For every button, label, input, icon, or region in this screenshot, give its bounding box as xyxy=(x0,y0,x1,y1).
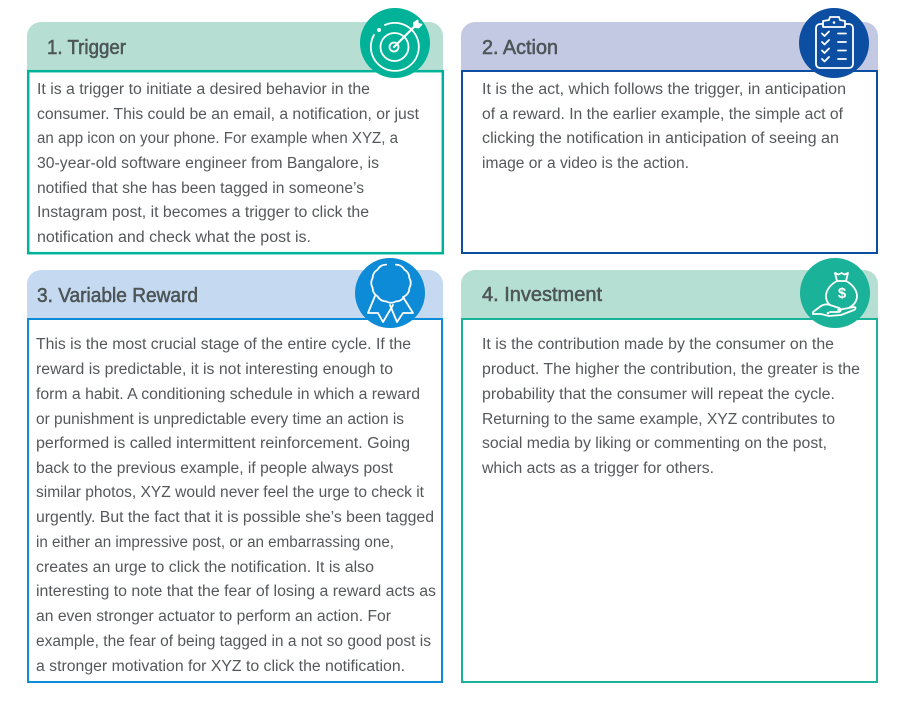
text block: Variable Reward description: in either an impressive post, or an embarrassing one, xyxy=(36,534,394,551)
text block: Investment description: which acts as a trigger for others. xyxy=(481,460,714,477)
text block: Investment description: probability that the consumer will repeat the cycle. xyxy=(482,386,835,403)
icon: target with dart xyxy=(360,8,430,78)
heading: 1. Trigger: 1. Trigger xyxy=(47,37,126,59)
text block: Variable Reward description xyxy=(36,336,436,675)
text block: Variable Reward description: form a habit. A conditioning schedule in which a reward xyxy=(36,386,420,403)
text block: Variable Reward description: a stronger motivation for XYZ to click the notification. xyxy=(36,658,405,675)
body box: Investment xyxy=(462,319,877,682)
panel: 4. Investment xyxy=(461,258,878,682)
text block: Action description: It is the act, which follows the trigger, in anticipation xyxy=(482,81,846,98)
heading: 2. Action: 2. Action xyxy=(482,37,558,59)
text block: Trigger description: Instagram post, it becomes a trigger to click the xyxy=(37,204,369,221)
text block: Variable Reward description: creates an urge to click the notification. It is also xyxy=(36,559,374,576)
panel: 2. Action xyxy=(461,8,878,253)
text block: Variable Reward description: performed is called intermittent reinforcement. Going xyxy=(36,435,410,452)
text block: Variable Reward description: back to the previous example, if people always post xyxy=(36,460,394,477)
text block: Variable Reward description: reward is predictable, it is not interesting enough to xyxy=(36,361,393,378)
heading: 3. Variable Reward: 3. Variable Reward xyxy=(37,285,198,307)
text block: Trigger description: It is a trigger to initiate a desired behavior in the xyxy=(37,81,370,98)
text block: Action description: image or a video is the action. xyxy=(482,155,689,172)
text block: Action description xyxy=(482,81,846,172)
text block: Investment description: product. The higher the contribution, the greater is the xyxy=(482,361,860,378)
text block: Trigger description: an app icon on your phone. For example when XYZ, a xyxy=(37,130,398,147)
text block: Trigger description: consumer. This could be an email, a notification, or just xyxy=(37,106,420,123)
icon: clipboard checklist xyxy=(799,8,869,78)
icon: award ribbon xyxy=(355,258,425,328)
text block: Trigger description: notified that she has been tagged in someone’s xyxy=(37,180,364,197)
text block: Trigger description xyxy=(37,81,420,246)
text block: Variable Reward description: or punishment is unpredictable every time an action is xyxy=(36,411,404,428)
body box: Variable Reward xyxy=(28,319,442,682)
text block: Variable Reward description: similar photos, XYZ would never feel the urge to check it xyxy=(36,484,425,501)
text block: Investment description: It is the contribution made by the consumer on the xyxy=(482,336,834,353)
header band: Investment xyxy=(461,270,878,319)
text block: Variable Reward description: interesting to note that the fear of losing a reward acts as xyxy=(36,583,436,600)
text block: Action description: clicking the notification in anticipation of seeing an xyxy=(482,130,839,147)
body box: Action xyxy=(462,71,877,253)
text block: Investment description: Returning to the same example, XYZ contributes to xyxy=(482,411,835,428)
text block: Investment description: social media by liking or commenting on the post, xyxy=(482,435,827,452)
text block: Variable Reward description: example, the fear of being tagged in a not so good post is xyxy=(36,633,431,650)
text block: Trigger description: 30-year-old software engineer from Bangalore, is xyxy=(37,155,379,172)
text block: Action description: of a reward. In the earlier example, the simple act of xyxy=(482,106,844,123)
icon label: dollar sign: $ xyxy=(838,285,847,302)
header band: Trigger xyxy=(27,22,443,71)
heading: 4. Investment: 4. Investment xyxy=(482,284,602,306)
header band: Variable Reward xyxy=(27,270,443,319)
text block: Variable Reward description: This is the most crucial stage of the entire cycle. If the xyxy=(36,336,411,353)
header band: Action xyxy=(461,22,878,71)
icon: money bag on hand xyxy=(800,258,870,328)
text block: Variable Reward description: urgently. But the fact that it is possible she’s been tagged xyxy=(36,509,434,526)
text block: Variable Reward description: an even stronger actuator to perform an action. For xyxy=(36,608,391,625)
text block: Trigger description: notification and check what the post is. xyxy=(37,229,311,246)
body box: Trigger xyxy=(28,71,443,253)
text block: Investment description xyxy=(481,336,860,477)
panel: 1. Trigger xyxy=(27,8,443,253)
panel: 3. Variable Reward xyxy=(27,258,443,682)
